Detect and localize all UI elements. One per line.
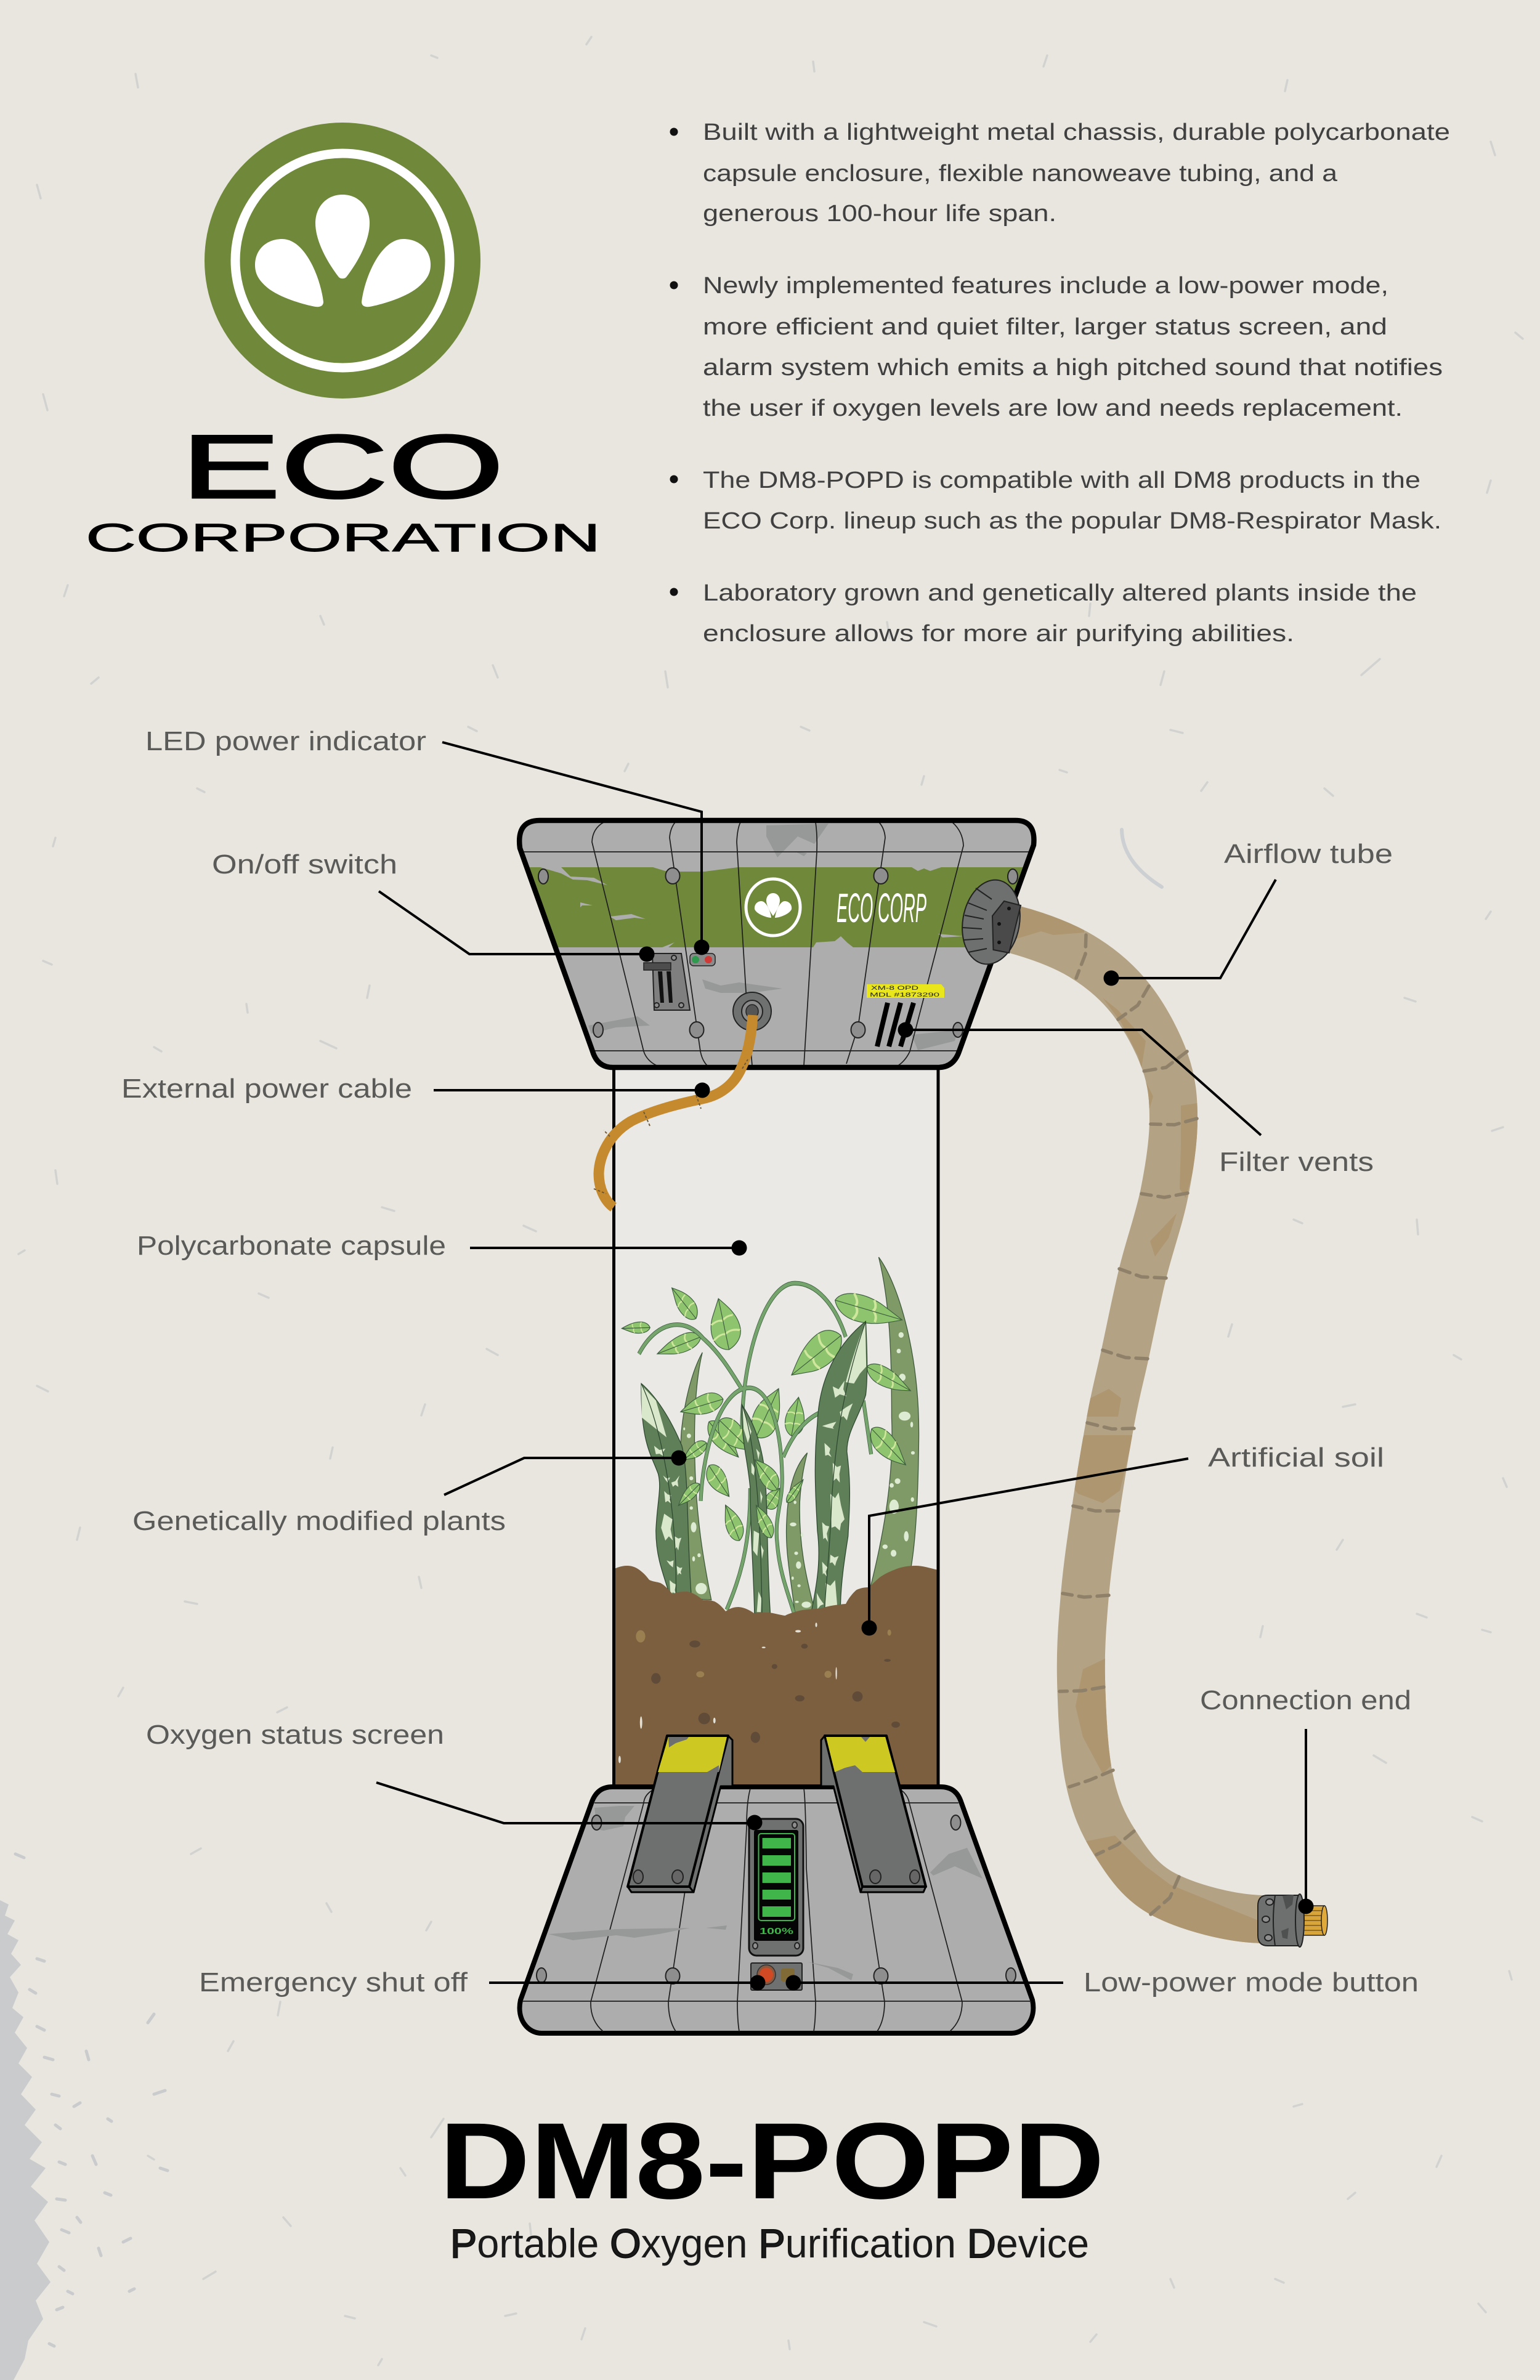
back snake plant leaves <box>681 1257 919 1616</box>
label: On/off switch: On/off switch <box>212 849 397 880</box>
label: Genetically modified plants: Genetically modified plants <box>132 1506 506 1536</box>
on/off switch <box>644 953 690 1010</box>
band emblem <box>746 879 800 936</box>
midribs on dark leaves <box>641 1321 865 1613</box>
leader: LED power indicator <box>442 742 710 955</box>
title: DM8-POPD: DM8-POPD <box>439 2101 1104 2222</box>
right mounting bracket <box>821 1736 926 1892</box>
polycarbonate capsule interior <box>614 1070 938 1791</box>
bullet 1: materials <box>670 119 1450 227</box>
vine stems outline <box>639 1283 871 1613</box>
texture: grey splatter bottom left <box>0 1854 168 2380</box>
bullet 3: compatibility <box>670 467 1441 534</box>
air inlet connector <box>956 875 1026 969</box>
leader: external power cable <box>434 1083 710 1098</box>
label: Polycarbonate capsule: Polycarbonate capsule <box>137 1231 446 1261</box>
battery bars <box>763 1838 791 1917</box>
leader: airflow tube <box>1104 880 1276 986</box>
panel seams <box>521 822 1032 1066</box>
brass nozzle <box>1294 1906 1327 1935</box>
screen readout: 100% <box>760 1926 793 1937</box>
bullet 4: plants: enclosure allows for more air purifying abilities. <box>703 621 1294 647</box>
leader: low-power mode button <box>786 1975 1063 1991</box>
bullet 2: new features <box>670 273 1443 421</box>
wear marks <box>588 824 958 1050</box>
leader: emergency shut off <box>489 1975 765 1991</box>
pale tips and mottling on dark leaves <box>641 1323 866 1612</box>
tube stained patches <box>1010 905 1269 1946</box>
plants in capsule <box>622 1257 919 1616</box>
top housing: ECO CORP <box>837 885 926 931</box>
emergency shut off button <box>757 1965 776 1985</box>
leader: oxygen status screen <box>376 1783 763 1831</box>
capsule walls <box>614 1070 938 1789</box>
connection end fitting <box>1258 1894 1327 1947</box>
label: External power cable: External power cable <box>121 1074 412 1104</box>
leader: connection end <box>1299 1729 1313 1914</box>
hazard yellow tip <box>658 1737 727 1772</box>
label: LED power indicator: LED power indicator <box>145 726 426 756</box>
dark snake plant leaves <box>641 1321 867 1613</box>
metal collar <box>1258 1894 1304 1947</box>
model label: XM-8 OPD <box>871 985 919 991</box>
bullet 4: plants <box>670 580 1417 647</box>
front vine leaves <box>680 1437 709 1465</box>
bullet 3: compatibility: ECO Corp. lineup such as the popular DM8-Respirator Mask. <box>703 508 1441 534</box>
leader: on/off switch <box>379 891 654 962</box>
label: Connection end: Connection end <box>1200 1685 1411 1715</box>
soil flecks <box>618 1622 900 1763</box>
bullet 2: new features: Newly implemented features include a low-power mode, <box>703 273 1388 299</box>
icon: three seed drops <box>255 195 431 307</box>
speckles on light leaves <box>683 1332 915 1608</box>
text block: product features list <box>670 119 1450 647</box>
label: Filter vents: Filter vents <box>1219 1147 1374 1177</box>
bullet 2: new features: the user if oxygen levels are low and needs replacement. <box>703 395 1403 421</box>
emergency and low-power buttons <box>751 1963 802 1990</box>
bullet 1: materials: capsule enclosure, flexible nanoweave tubing, and a <box>703 161 1338 187</box>
label: Emergency shut off: Emergency shut off <box>199 1967 468 1997</box>
left mounting bracket <box>628 1736 732 1892</box>
bullet 1: materials: generous 100-hour life span. <box>703 201 1056 227</box>
label: Oxygen status screen: Oxygen status screen <box>146 1720 444 1750</box>
company name: ECO: ECO <box>181 416 504 517</box>
subtitle: Portable Oxygen Purification Device <box>450 2220 1089 2266</box>
label: Low-power mode button: Low-power mode button <box>1084 1967 1419 1997</box>
pothos vine leaves, back <box>622 1281 914 1513</box>
screws <box>538 868 1018 1038</box>
LED power indicator <box>690 953 715 966</box>
bottom housing <box>520 1787 1033 2033</box>
vine stems fill <box>639 1283 871 1613</box>
bullet 2: new features: more efficient and quiet filter, larger status screen, and <box>703 314 1387 340</box>
screws <box>537 1815 1016 1984</box>
leader: filter vents <box>898 1022 1261 1135</box>
model label <box>867 984 944 998</box>
external power cable <box>594 1015 753 1207</box>
oxygen status screen <box>749 1819 803 1956</box>
bullet 3: compatibility: The DM8-POPD is compatible with all DM8 products in the <box>703 467 1420 493</box>
logo: Eco Corporation emblem <box>205 123 480 399</box>
wear marks <box>548 1806 983 1980</box>
airflow tube <box>1010 905 1269 1946</box>
filter vents <box>877 1003 914 1046</box>
leader: polycarbonate capsule <box>470 1241 747 1255</box>
hazard yellow tip <box>826 1737 895 1772</box>
low-power mode button <box>781 1969 795 1981</box>
tube stitching <box>1060 935 1197 1914</box>
green brand band <box>517 867 1035 947</box>
panel seams <box>522 1789 1031 2031</box>
company name: CORPORATION: CORPORATION <box>86 516 601 560</box>
model label: MDL #1873290 <box>870 992 939 998</box>
outline <box>519 820 1034 1067</box>
label: Airflow tube: Airflow tube <box>1224 839 1393 869</box>
leader: artificial soil <box>861 1459 1188 1636</box>
artificial soil <box>614 1566 938 1789</box>
top housing <box>517 820 1035 1067</box>
bullet 2: new features: alarm system which emits a high pitched sound that notifies <box>703 355 1443 381</box>
bullet 1: materials: Built with a lightweight metal chassis, durable polycarbonate <box>703 119 1450 145</box>
label: Artificial soil: Artificial soil <box>1208 1443 1384 1473</box>
bullet 4: plants: Laboratory grown and genetically altered plants inside the <box>703 580 1417 606</box>
worn paint patches <box>540 867 964 947</box>
power socket <box>733 992 771 1030</box>
leader: genetically modified plants <box>444 1450 686 1495</box>
